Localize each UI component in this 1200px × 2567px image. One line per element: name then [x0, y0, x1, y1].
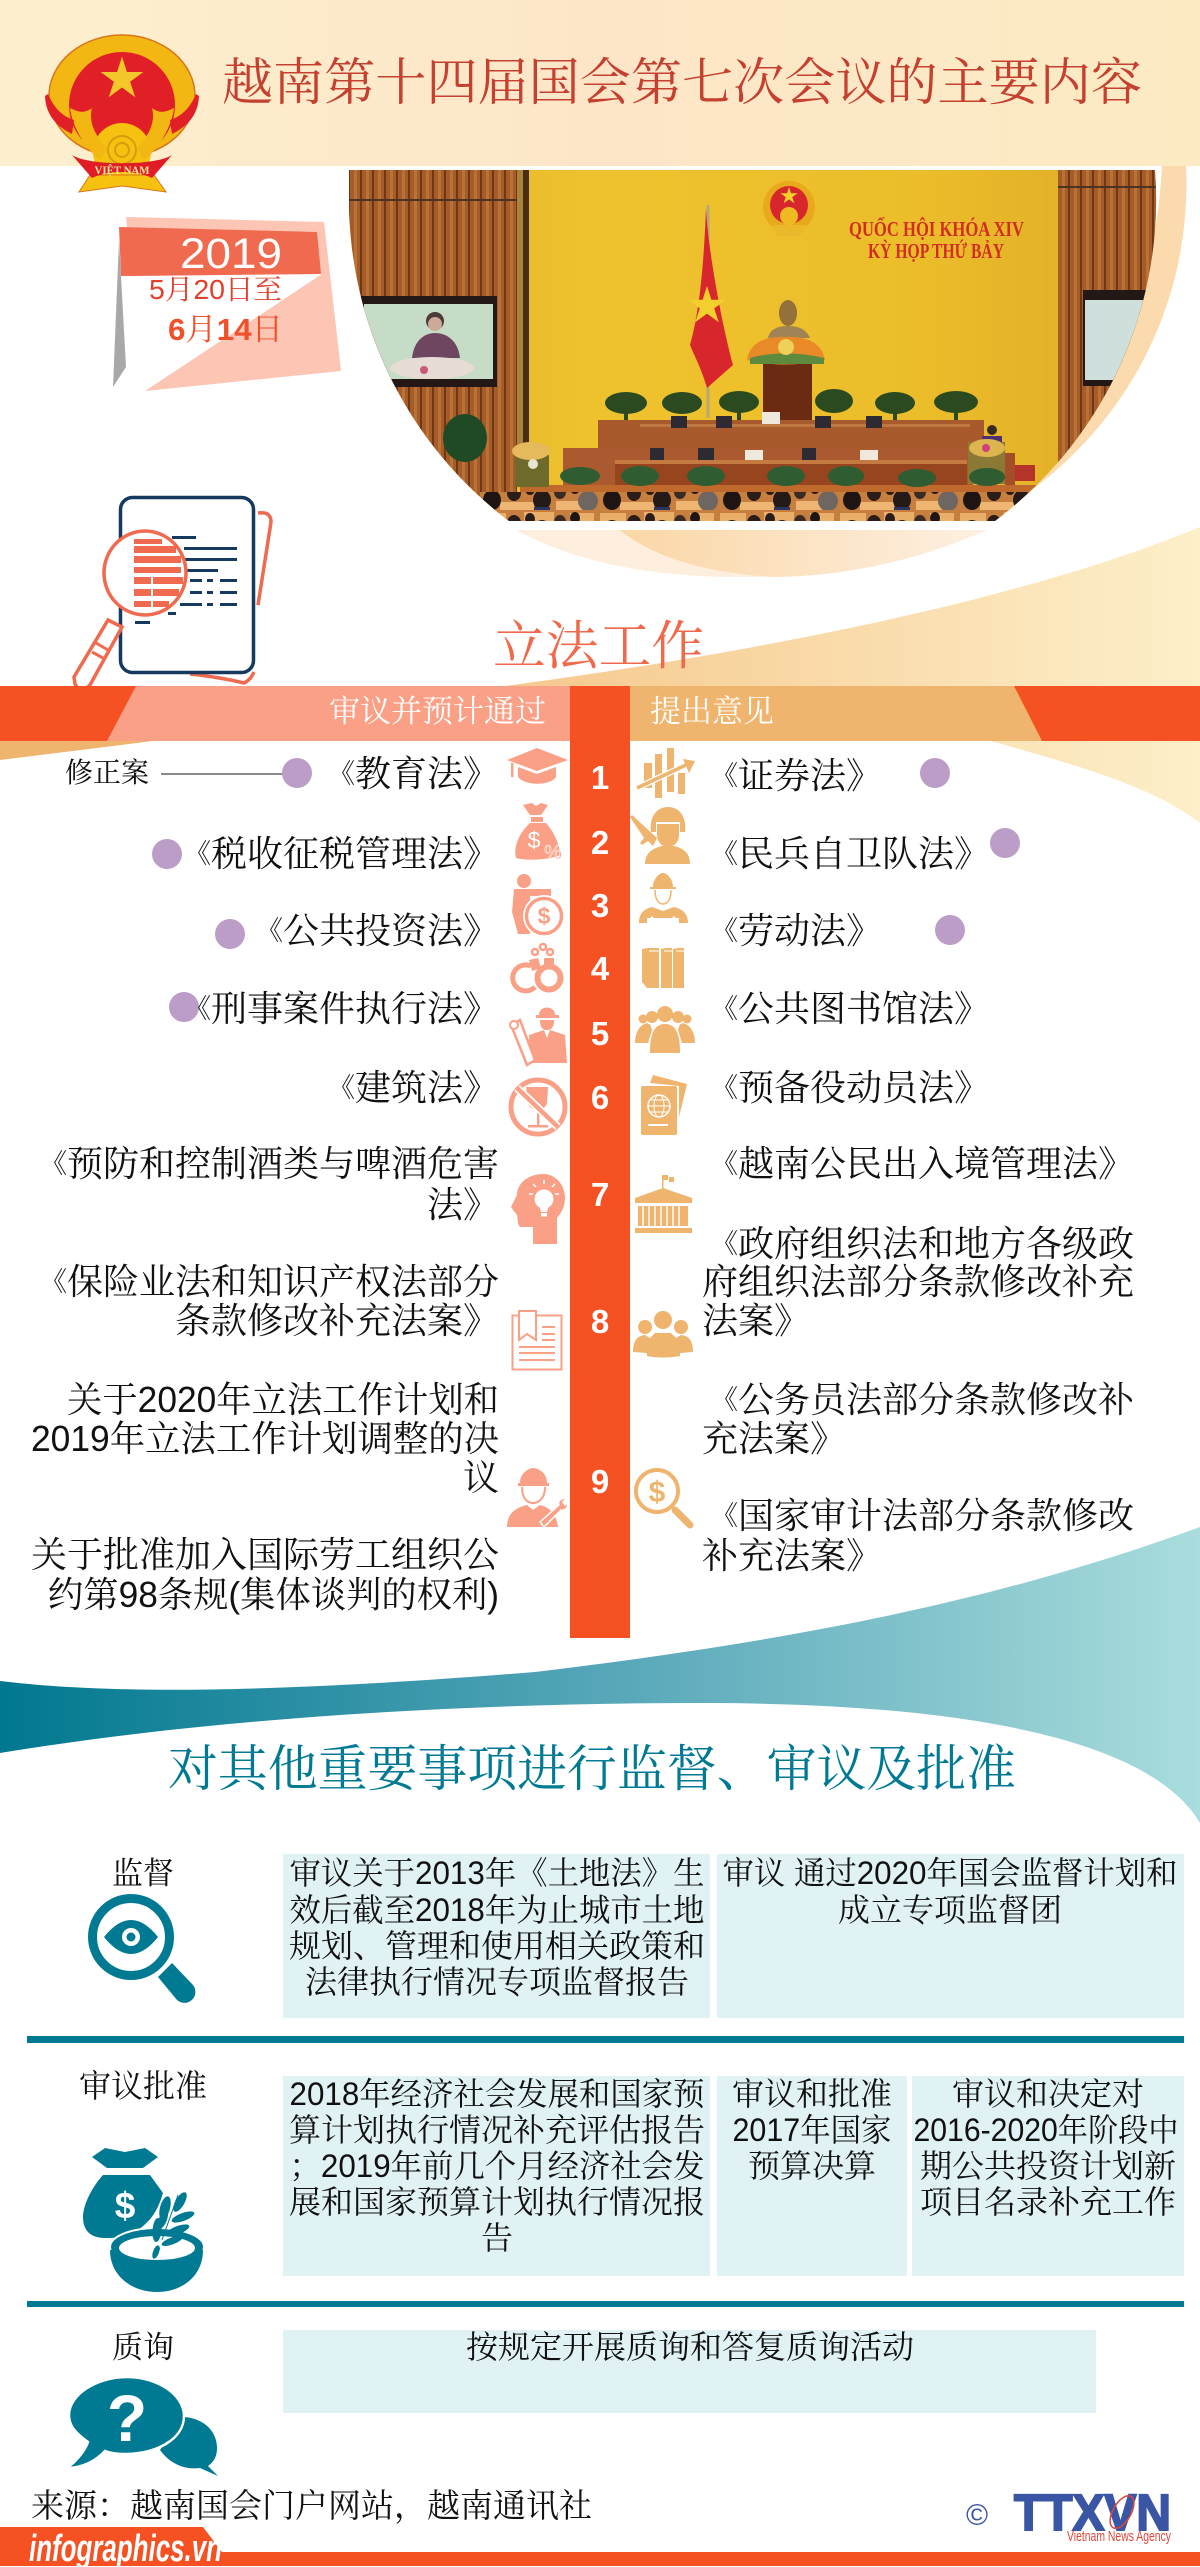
icon: dollar magnifier [636, 1470, 690, 1525]
right column laws: 《 [711, 916, 738, 946]
icon: investor with coin: $ [538, 903, 551, 929]
icon: head with lightbulb [511, 1174, 565, 1244]
center timeline column [570, 686, 630, 1638]
center timeline column: 3 [591, 887, 609, 924]
center timeline column: 7 [591, 1176, 609, 1213]
delegates on dais [650, 412, 1002, 460]
amendment markers [152, 758, 1020, 1022]
right column laws: 《 [711, 994, 738, 1024]
icon: money bag and rice bowl [83, 2148, 204, 2292]
center timeline column: 1 [591, 759, 609, 796]
box: supervision plan: 成立专项监督团 [838, 1892, 1062, 1928]
wall lettering: KỲ HỌP THỨ BẢY [868, 239, 1004, 263]
row label: 监督 [112, 1856, 174, 1891]
photo lower accent [516, 530, 987, 577]
icon: passport [641, 1075, 687, 1135]
left column laws: 议 [463, 1457, 499, 1498]
row: questioning [67, 2329, 1096, 2476]
photo crescent accent [1025, 166, 1186, 495]
icon: question bubbles: ? [107, 2381, 147, 2455]
row label: 质询 [112, 2330, 174, 2365]
box: socio-economic reports: 算计划执行情况补充评估报告 [289, 2112, 705, 2148]
icon: books [642, 948, 684, 988]
wall lettering [849, 217, 1024, 263]
national emblem: VIỆT NAM [94, 163, 150, 177]
right column laws [702, 755, 1134, 1576]
left column laws: 条款修改补充法案》 [175, 1300, 499, 1341]
left column laws: 法》 [427, 1184, 499, 1225]
icon: group of people [633, 1311, 693, 1358]
date calendar [113, 217, 341, 398]
photo: national assembly hall [340, 170, 1170, 525]
right column laws: 证券法》 [738, 755, 882, 796]
right column laws: 劳动法》 [738, 910, 882, 951]
right icons [630, 748, 695, 1525]
center timeline column: 8 [591, 1303, 609, 1340]
icon: worker with wrench [507, 1468, 568, 1527]
TTXVN logo: TTXVN [1014, 2484, 1171, 2541]
teal swoosh [0, 1527, 1200, 1823]
left column laws: 关于批准加入国际劳工组织公 [31, 1534, 499, 1575]
icon: construction worker [639, 873, 688, 923]
title: 越南第十四届国会第七次会议的主要内容 [222, 54, 1142, 111]
box: public investment plan: 审议和决定对 [952, 2076, 1144, 2112]
left column laws: 关于2020年立法工作计划和 [67, 1379, 499, 1420]
left column laws: 《 [256, 916, 283, 946]
left column laws: 《 [184, 994, 211, 1024]
center timeline column: 4 [591, 950, 610, 987]
left tree and flower stands [443, 414, 1005, 487]
left column laws: 建筑法》 [355, 1067, 499, 1108]
left column laws: 《 [40, 1149, 67, 1179]
box: state budget: 2017年国家 [732, 2112, 892, 2148]
left column laws: 《 [328, 1073, 355, 1103]
center timeline column: 6 [591, 1079, 609, 1116]
right column header: 提出意见 [650, 694, 774, 729]
box: supervision plan: 审议 通过2020年国会监督计划和 [722, 1855, 1178, 1891]
TTXVN logo: © [966, 2499, 988, 2532]
right column laws: 法案》 [702, 1300, 810, 1341]
box: socio-economic reports: 告 [481, 2220, 513, 2256]
right column laws: 预备役动员法》 [738, 1067, 990, 1108]
box: questioning activities [283, 2329, 1096, 2413]
left screen [350, 296, 497, 387]
icon: document with bookmark [512, 1311, 562, 1370]
right column laws: 府组织法部分条款修改补充 [702, 1261, 1134, 1302]
left column laws: 《 [40, 1267, 67, 1297]
header band [0, 0, 1200, 166]
right column laws: 《 [711, 1073, 738, 1103]
box: public investment plan: 期公共投资计划新 [920, 2148, 1176, 2184]
right column laws: 民兵自卫队法》 [738, 833, 990, 874]
right column laws: 《 [711, 1229, 738, 1259]
national emblem [45, 35, 199, 192]
box: questioning activities: 按规定开展质询和答复质询活动 [466, 2329, 914, 2365]
icon: handcuffs [513, 944, 560, 991]
row: review and approval [79, 2068, 1184, 2292]
box: land law report: 审议关于2013年《土地法》生 [290, 1855, 704, 1891]
box: state budget: 预算决算 [748, 2148, 876, 2184]
right column laws: 充法案》 [702, 1418, 846, 1459]
plants [605, 389, 978, 420]
left column laws: 2019年立法工作计划调整的决 [31, 1418, 499, 1459]
icon: market chart [637, 748, 695, 798]
box: socio-economic reports: ；2019年前几个月经济社会发 [290, 2148, 704, 2184]
section heading: supervision and approval: 对其他重要事项进行监督、审议及批准 [168, 1741, 1016, 1797]
box: public investment plan [912, 2076, 1184, 2276]
box: state budget: 审议和批准 [732, 2076, 892, 2112]
box: land law report [283, 1854, 710, 2018]
left column laws: 《 [328, 759, 355, 789]
left column header: 审议并预计通过 [329, 694, 546, 729]
bust with flowers and podium [747, 300, 825, 424]
footer bar with site label [0, 2527, 1200, 2567]
left column laws: 教育法》 [355, 753, 499, 794]
date calendar: 5月20日至 [149, 274, 282, 305]
icon: money bag: % [544, 842, 562, 864]
section heading: legislative work: 立法工作 [493, 617, 704, 676]
icon: question bubbles [67, 2377, 218, 2476]
front row plants [560, 466, 1005, 487]
right column laws: 公共图书馆法》 [738, 988, 990, 1029]
wall emblem [763, 181, 815, 228]
row: supervision [92, 1854, 1184, 2018]
center timeline column: 2 [591, 824, 609, 861]
left column laws: 税收征税管理法》 [211, 833, 499, 874]
right column laws: 《 [711, 761, 738, 791]
flag [688, 205, 733, 418]
box: land law report: 法律执行情况专项监督报告 [305, 1964, 689, 2000]
right column laws: 补充法案》 [702, 1535, 882, 1576]
icon: graduation cap [507, 748, 568, 784]
icon: no alcohol [511, 1080, 565, 1134]
box: socio-economic reports [283, 2076, 710, 2276]
box: public investment plan: 2016-2020年阶段中 [914, 2112, 1178, 2148]
left column laws: 《 [184, 839, 211, 869]
box: state budget [717, 2076, 907, 2276]
right screen [1083, 290, 1146, 386]
left column laws: 刑事案件执行法》 [211, 988, 499, 1029]
icon: money bag [515, 803, 562, 864]
center timeline column: 9 [591, 1463, 609, 1500]
left column laws [31, 753, 499, 1615]
right column laws: 国家审计法部分条款修改 [738, 1495, 1134, 1536]
wall lettering: QUỐC HỘI KHÓA XIV [849, 217, 1024, 241]
TTXVN logo [966, 2484, 1171, 2545]
box: public investment plan: 项目名录补充工作 [920, 2184, 1176, 2220]
left column laws: 约第98条规(集体谈判的权利) [48, 1574, 499, 1615]
left icons [507, 748, 568, 1527]
icon: money bag and rice bowl: $ [115, 2185, 136, 2226]
icon: money bag: $ [528, 827, 541, 853]
date calendar: 2019 [180, 230, 282, 278]
icon: crowd [635, 1006, 695, 1053]
icon: dollar magnifier: $ [649, 1476, 666, 1509]
right column laws: 《 [711, 1501, 738, 1531]
center timeline column: 5 [591, 1015, 609, 1052]
icon: government building [635, 1175, 692, 1233]
box: socio-economic reports: 2018年经济社会发展和国家预 [290, 2076, 704, 2112]
right column laws: 《 [711, 1149, 738, 1179]
row label: 审议批准 [79, 2068, 207, 2104]
box: land law report: 规划、管理和使用相关政策和 [289, 1928, 705, 1964]
icon: investor with coin [512, 874, 565, 937]
right column laws: 《 [711, 839, 738, 869]
date calendar: 6月14日 [168, 312, 283, 347]
icon: architect [510, 1008, 567, 1065]
left column laws: 预防和控制酒类与啤酒危害 [67, 1143, 499, 1184]
box: supervision plan [717, 1854, 1184, 2018]
right column laws: 《 [711, 1385, 738, 1415]
right column laws: 公务员法部分条款修改补 [738, 1379, 1134, 1420]
icon: militia soldier [630, 807, 690, 864]
icon: document under magnifier [74, 498, 271, 689]
band: two-column header [0, 686, 1200, 741]
icon: eye magnifier [92, 1898, 195, 2003]
amendment legend: 修正案 [65, 757, 149, 788]
source note: 来源：越南国会门户网站，越南通讯社 [31, 2487, 592, 2525]
dais tiers [520, 420, 1040, 494]
left column laws: 保险业法和知识产权法部分 [67, 1261, 499, 1302]
left column laws: 公共投资法》 [283, 910, 499, 951]
right column laws: 政府组织法和地方各级政 [738, 1223, 1134, 1264]
right column laws: 越南公民出入境管理法》 [738, 1143, 1134, 1184]
orange swoosh background [0, 527, 1200, 823]
box: land law report: 效后截至2018年为止城市土地 [290, 1892, 704, 1928]
audience [480, 492, 1030, 521]
box: socio-economic reports: 展和国家预算计划执行情况报 [289, 2184, 705, 2220]
